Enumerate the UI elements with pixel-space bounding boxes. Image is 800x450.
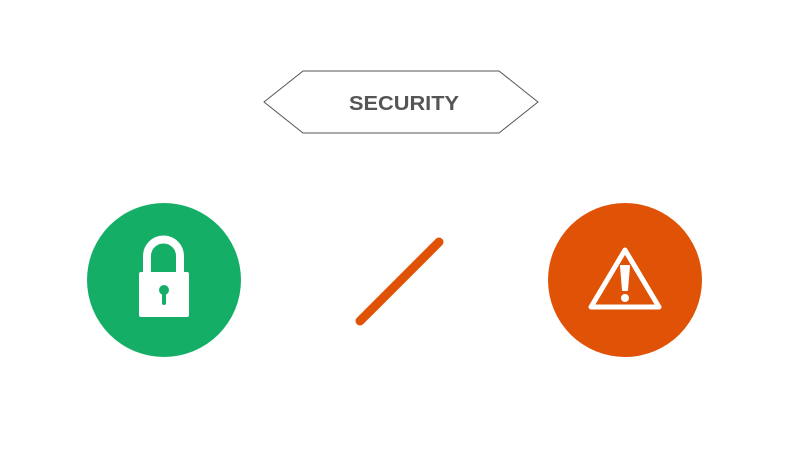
title text: SECURITY — [349, 93, 460, 115]
icon: orange warning circle — [548, 203, 702, 357]
title banner — [264, 71, 538, 133]
divider slash — [360, 242, 439, 321]
icon: green lock circle — [87, 203, 241, 357]
